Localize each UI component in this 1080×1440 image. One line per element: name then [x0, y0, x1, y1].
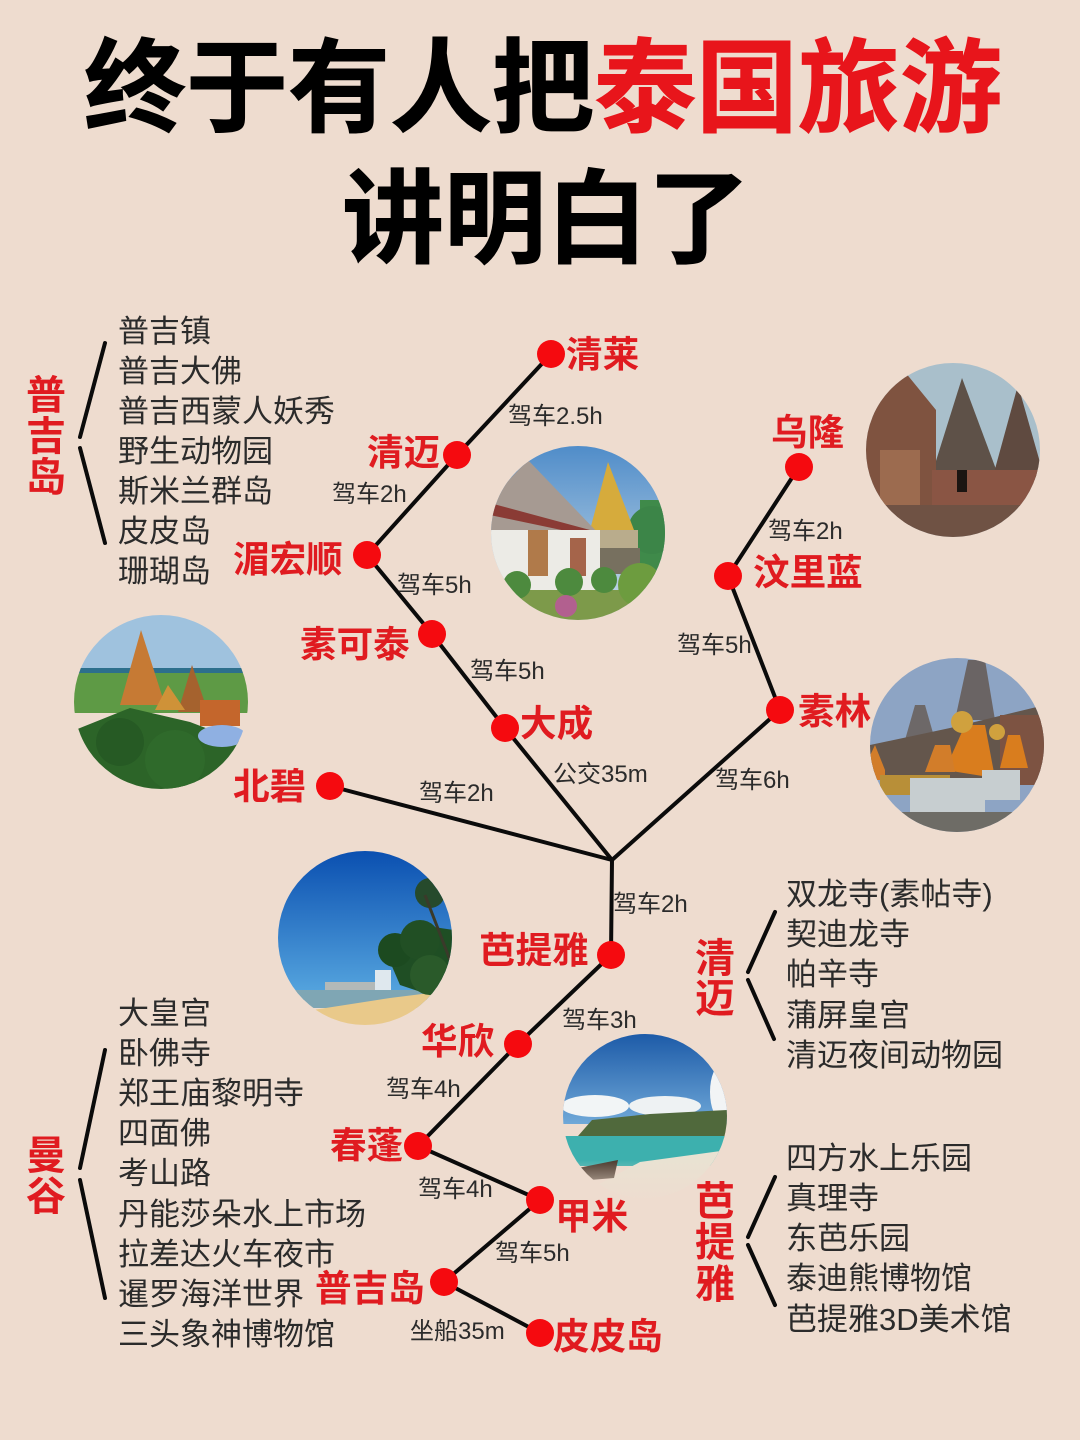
attraction list: 清迈: 契迪龙寺 — [786, 917, 910, 952]
side label: 普吉岛: 岛 — [26, 456, 66, 500]
attraction list: 芭提雅: 泰迪熊博物馆 — [786, 1261, 972, 1296]
list bracket: 曼谷 — [80, 1050, 105, 1298]
attraction list: 清迈: 帕辛寺 — [786, 957, 879, 992]
route stops: red dots — [316, 340, 813, 1347]
attraction list: 普吉岛: 皮皮岛 — [118, 514, 211, 549]
attraction list: 曼谷: 卧佛寺 — [118, 1036, 211, 1071]
attraction list: 曼谷 — [118, 996, 366, 1352]
travel time labels: 坐船35m — [410, 1318, 505, 1345]
attraction list: 普吉岛 — [118, 314, 335, 589]
attraction list: 芭提雅: 芭提雅3D美术馆 — [786, 1302, 1012, 1337]
travel time labels: 驾车2.5h — [508, 403, 603, 430]
attraction list: 清迈: 蒲屏皇宫 — [786, 998, 910, 1033]
travel time labels — [332, 403, 843, 1345]
attraction list: 芭提雅: 真理寺 — [786, 1181, 879, 1216]
photo: Krabi beach — [563, 1034, 727, 1180]
stop names: 湄宏顺 — [233, 539, 343, 580]
side label: 清迈: 迈 — [695, 977, 735, 1021]
stop names: 芭提雅 — [479, 930, 589, 971]
stop names: 大成 — [520, 703, 593, 744]
photo: Chiang Mai temple — [490, 445, 676, 625]
travel time labels: 驾车6h — [715, 767, 790, 794]
attraction list: 清迈: 清迈夜间动物园 — [786, 1038, 1003, 1073]
side label: 曼谷 — [26, 1134, 66, 1219]
travel time labels: 公交35m — [553, 761, 648, 788]
travel time labels: 驾车4h — [418, 1176, 493, 1203]
side label: 曼谷: 谷 — [26, 1175, 66, 1219]
attraction list: 曼谷: 大皇宫 — [118, 996, 211, 1031]
attraction list: 清迈 — [786, 877, 1003, 1073]
stop names: 皮皮岛 — [553, 1316, 663, 1357]
attraction list: 曼谷: 郑王庙黎明寺 — [118, 1076, 304, 1111]
side label: 普吉岛: 普 — [26, 374, 66, 418]
list bracket: 清迈 — [748, 912, 775, 1039]
attraction list: 曼谷: 丹能莎朵水上市场 — [118, 1197, 366, 1232]
attraction list: 曼谷: 考山路 — [118, 1156, 211, 1191]
stop names: 华欣 — [421, 1021, 495, 1062]
attraction list: 芭提雅: 四方水上乐园 — [786, 1141, 972, 1176]
stop names: 普吉岛 — [315, 1268, 425, 1309]
list bracket: 普吉岛 — [80, 343, 105, 543]
stop names: 清莱 — [566, 334, 639, 375]
side label: 芭提雅 — [695, 1180, 735, 1307]
side label: 普吉岛 — [26, 374, 66, 500]
stop names: 北碧 — [233, 766, 306, 807]
title: 讲明白了 — [342, 163, 750, 277]
attraction list: 曼谷: 三头象神博物馆 — [118, 1317, 335, 1352]
list bracket: 芭提雅 — [748, 1177, 775, 1305]
travel time labels: 驾车5h — [397, 572, 472, 599]
side label: 清迈 — [695, 937, 735, 1021]
travel time labels: 驾车3h — [562, 1007, 637, 1034]
travel time labels: 驾车5h — [495, 1240, 570, 1267]
attraction list: 曼谷: 四面佛 — [118, 1116, 211, 1151]
side label: 芭提雅: 雅 — [695, 1263, 735, 1307]
side label: 曼谷: 曼 — [26, 1134, 66, 1178]
travel time labels: 驾车2h — [332, 481, 407, 508]
attraction list: 普吉岛: 野生动物园 — [118, 434, 273, 469]
photo: Pattaya beach — [278, 850, 454, 1030]
photo: Banteay Srei temple — [865, 362, 1045, 541]
side label: 普吉岛: 吉 — [26, 415, 66, 459]
stop names: 春蓬 — [330, 1125, 403, 1166]
travel time labels: 驾车4h — [386, 1076, 461, 1103]
attraction list: 曼谷: 拉差达火车夜市 — [118, 1237, 335, 1272]
attraction list: 普吉岛: 普吉镇 — [118, 314, 211, 349]
attraction list: 普吉岛: 斯米兰群岛 — [118, 474, 273, 509]
stop names: 乌隆 — [771, 412, 845, 453]
attraction list: 芭提雅 — [786, 1141, 1012, 1337]
title — [84, 32, 1002, 277]
attraction list: 普吉岛: 普吉大佛 — [118, 354, 242, 389]
route network lines — [330, 354, 799, 1333]
attraction list: 曼谷: 暹罗海洋世界 — [118, 1277, 304, 1312]
stop names: 素林 — [798, 691, 871, 732]
travel time labels: 驾车2h — [768, 518, 843, 545]
stop names: 甲米 — [555, 1196, 628, 1237]
stop names: 素可泰 — [300, 624, 410, 665]
photo: Surin Buddhas — [868, 658, 1046, 836]
stop names: 清迈 — [367, 432, 440, 473]
travel time labels: 驾车2h — [419, 780, 494, 807]
attraction list: 芭提雅: 东芭乐园 — [786, 1221, 910, 1256]
attraction list: 普吉岛: 珊瑚岛 — [118, 554, 211, 589]
title: 终于有人把泰国旅游 — [84, 32, 1002, 146]
travel time labels: 驾车5h — [470, 658, 545, 685]
stop names — [233, 334, 871, 1357]
photo: Kanchanaburi temple — [74, 615, 250, 790]
side label: 芭提雅: 提 — [695, 1221, 735, 1265]
travel time labels: 驾车5h — [677, 632, 752, 659]
travel time labels: 驾车2h — [613, 891, 688, 918]
attraction list: 清迈: 双龙寺(素帖寺) — [786, 877, 993, 912]
side label: 清迈: 清 — [695, 937, 735, 981]
stop names: 汶里蓝 — [753, 552, 863, 593]
attraction list: 普吉岛: 普吉西蒙人妖秀 — [118, 394, 335, 429]
side label: 芭提雅: 芭 — [695, 1180, 735, 1224]
